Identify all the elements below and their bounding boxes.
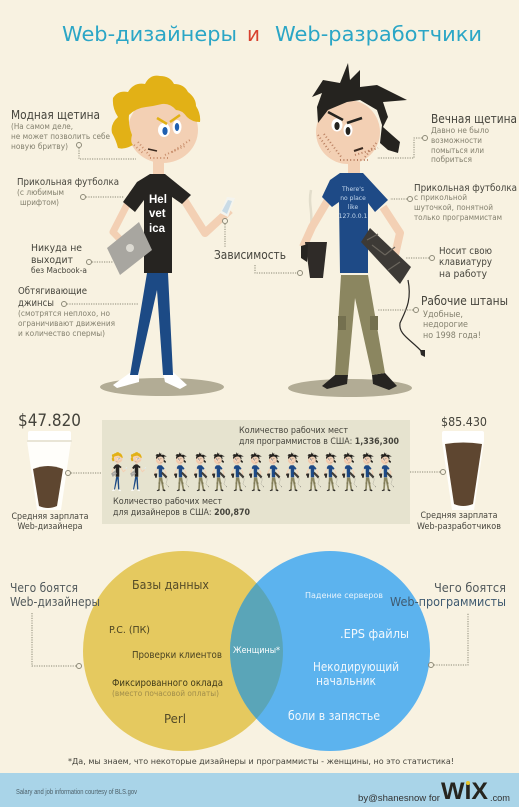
label: keyboard: клавиатуру: [439, 257, 492, 268]
designers fears: [109, 578, 223, 726]
developer salary: coffee cup: Средняя зарплата: [420, 511, 498, 521]
shirt text: Helvetica: ica: [149, 223, 166, 235]
label: developer stubble: Давно не было: [431, 126, 489, 135]
title: и: [247, 22, 260, 46]
label: developers fear: Чего боятся: [434, 580, 506, 595]
shirt text: 127.0.0.1: 127.0.0.1: [339, 213, 367, 220]
overlap: [230, 583, 283, 719]
label: developer stubble: побриться: [431, 155, 472, 164]
label: macbook: [31, 243, 113, 275]
venn diagram: fears: [83, 551, 430, 751]
label: designers fear: Web-дизайнеры: [10, 594, 100, 609]
label: macbook: Никуда не: [31, 243, 82, 254]
label: designer t-shirt: [17, 177, 124, 207]
label: developer stubble: возможности: [431, 136, 482, 145]
label: designer stubble: не может позволить себе: [11, 132, 110, 141]
label: keyboard: Носит свою: [439, 246, 492, 257]
title: Web-дизайнеры: [62, 22, 237, 46]
wix logo: WIX: [441, 778, 488, 805]
wix logo: [358, 778, 510, 805]
title: [62, 22, 482, 46]
title: Web-разработчики: [275, 22, 482, 46]
designers jobs text: Количество рабочих мест: [113, 497, 222, 507]
label: addiction: [214, 218, 302, 276]
developer salary: coffee cup: $85.430: [441, 414, 487, 429]
developers fears: боли в запястье: [288, 708, 380, 723]
label: addiction: Зависимость: [214, 247, 286, 262]
designer salary: coffee cup: Средняя зарплата: [12, 512, 88, 522]
shared fear: Женщины*: [233, 646, 280, 656]
footer bar: [0, 773, 519, 807]
label: work pants: [378, 294, 508, 341]
label: skinny jeans: Обтягивающие: [18, 286, 87, 297]
illustration: web developer: [288, 63, 425, 397]
label: designer stubble: Модная щетина: [11, 108, 100, 122]
programmers jobs text: Количество рабочих мест: [239, 426, 348, 436]
label: developer t-shirt: [390, 183, 517, 222]
label: developer t-shirt: только программистам: [414, 213, 502, 222]
developer salary: coffee cup: [410, 414, 501, 532]
label: designers fear: [10, 580, 100, 668]
developers fears: [288, 591, 409, 723]
credit: Salary and job information courtesy of BLS.gov: [16, 789, 137, 796]
panel: number of jobs: [102, 420, 410, 524]
label: designer stubble: [11, 108, 136, 159]
label: designer stubble: (На самом деле,: [11, 122, 73, 131]
designers fears: (вместо почасовой оплаты): [112, 689, 219, 698]
label: developer stubble: помыться или: [431, 146, 484, 155]
label: designer t-shirt: Прикольная футболка: [17, 177, 119, 188]
developers fears: Некодирующий: [313, 659, 399, 674]
shirt text: Helvetica: vet: [149, 208, 166, 220]
label: designer stubble: новую бритву): [11, 142, 68, 151]
label: developer t-shirt: шуточкой, понятной: [414, 203, 493, 212]
designers jobs text: для дизайнеров в США: 200,870: [113, 508, 250, 518]
label: developers fear: Web-программисты: [390, 594, 506, 609]
programmers jobs text: для программистов в США: 1,336,300: [239, 437, 399, 447]
designer salary: coffee cup: [12, 411, 102, 532]
label: skinny jeans: [18, 286, 138, 338]
label: work pants: Рабочие штаны: [421, 294, 508, 308]
designers circle: [83, 551, 283, 751]
shirt text: 127.0.0.1: There's: [341, 186, 364, 193]
label: work pants: Удобные,: [423, 310, 463, 320]
label: skinny jeans: ограничивают движения: [18, 319, 115, 328]
label: designer t-shirt: (с любимым: [17, 188, 64, 197]
label: designer t-shirt: шрифтом): [20, 198, 59, 207]
wix logo: by@shanesnow for: [358, 793, 440, 804]
label: skinny jeans: (смотрятся неплохо, но: [18, 309, 110, 318]
programmers jobs text: [239, 426, 399, 447]
footnote: *Да, мы знаем, что некоторые дизайнеры и программисты - женщины, но это статистика!: [68, 756, 454, 766]
label: macbook: без Macbook-а: [31, 266, 87, 275]
label: keyboard: [406, 246, 492, 280]
developers fears: Падение серверов: [305, 591, 383, 600]
designers fears: Базы данных: [132, 578, 209, 592]
developers fears: начальник: [316, 673, 376, 688]
label: developer stubble: [377, 112, 517, 164]
shirt text: Helvetica: Hel: [149, 194, 167, 206]
designers fears: P.C. (ПК): [109, 625, 150, 636]
developers fears: .EPS файлы: [340, 626, 409, 641]
designer salary: coffee cup: $47.820: [18, 411, 81, 431]
shirt text: Helvetica: [149, 194, 167, 235]
developer salary: coffee cup: Web-разработчиков: [417, 522, 501, 532]
developers circle: [230, 551, 430, 751]
label: skinny jeans: и количество спермы): [18, 329, 105, 338]
label: designers fear: Чего боятся: [10, 580, 78, 595]
shirt text: 127.0.0.1: no place: [340, 195, 366, 202]
designer salary: coffee cup: Web-дизайнера: [18, 522, 82, 532]
illustration: web designer: [100, 76, 235, 396]
label: skinny jeans: джинсы: [18, 298, 54, 309]
label: work pants: но 1998 года!: [423, 331, 481, 341]
pictogram row: [111, 452, 394, 491]
label: keyboard: на работу: [439, 269, 487, 280]
label: work pants: недорогие: [423, 320, 468, 330]
label: developer t-shirt: с прикольной: [414, 193, 467, 202]
designers jobs text: [113, 497, 250, 518]
label: developers fear: [390, 580, 506, 668]
shirt text: 127.0.0.1: [339, 186, 367, 220]
designers fears: Проверки клиентов: [132, 650, 222, 661]
designers fears: Фиксированного оклада: [112, 678, 223, 689]
wix logo: .com: [490, 793, 510, 804]
label: macbook: выходит: [31, 255, 73, 266]
designers fears: Perl: [164, 711, 186, 726]
shirt text: 127.0.0.1: like: [348, 204, 358, 211]
